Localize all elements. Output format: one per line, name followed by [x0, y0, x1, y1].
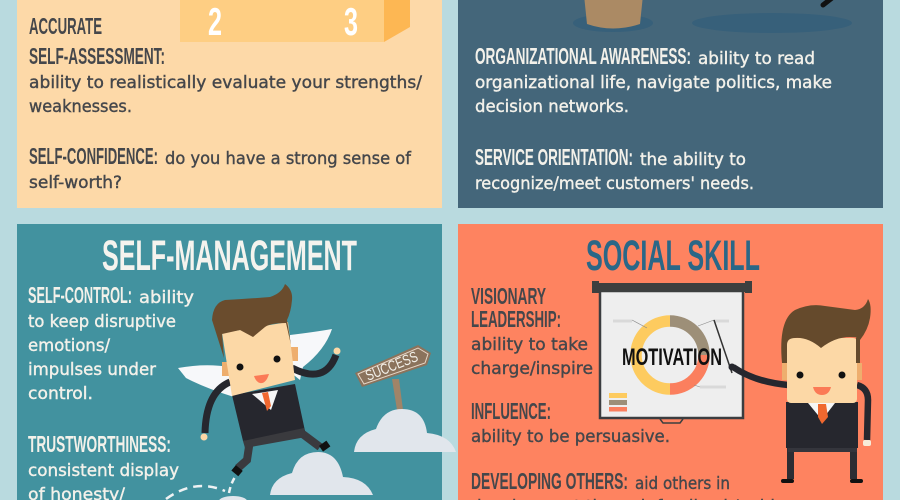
- head and face: [222, 322, 295, 396]
- text: organizational awareness: organizational life, navigate politics, make: [475, 73, 832, 93]
- text: visionary leadership: [471, 283, 593, 379]
- text: influence: INFLUENCE:: [471, 398, 551, 424]
- panel: self-management: [17, 224, 456, 500]
- text: self-confidence: [29, 143, 412, 193]
- icon: success signpost: SUCCESS: [363, 348, 420, 385]
- text: service orientation: [475, 144, 754, 194]
- text: self-confidence: self-worth?: [29, 173, 122, 193]
- text: trustworthiness: consistent display: [28, 461, 179, 481]
- text: developing others: DEVELOPING OTHERS:: [471, 468, 628, 494]
- text: self-confidence: SELF-CONFIDENCE:: [29, 143, 158, 169]
- head and face: [787, 338, 857, 403]
- text: visionary leadership: VISIONARY: [471, 283, 546, 309]
- legs: [238, 432, 320, 468]
- text: organizational awareness: [475, 43, 832, 117]
- text: accurate self-assessment: SELF-ASSESSMENT:: [29, 43, 165, 69]
- text: visionary leadership: charge/inspire: [471, 359, 593, 379]
- icon: dashed jump path: [166, 474, 247, 500]
- text: accurate self-assessment: weaknesses.: [29, 97, 132, 117]
- icon: podium: 2: [208, 1, 222, 44]
- chart legend: [609, 393, 627, 412]
- text: organizational awareness: decision networks.: [475, 97, 629, 117]
- text: visionary leadership: ability to take: [471, 335, 588, 355]
- icon: cloud under sign: [354, 409, 456, 452]
- chart title: MOTIVATION: [622, 344, 722, 371]
- text: service orientation: recognize/meet customers' needs.: [475, 174, 754, 194]
- callout lines: [613, 321, 729, 387]
- panel: social awareness: [458, 0, 883, 208]
- text: influence: ability to be persuasive.: [471, 427, 670, 447]
- text: influence: [471, 398, 670, 447]
- icon: figure shadow and shoe: [692, 0, 852, 33]
- chart: motivation presentation board: [592, 281, 752, 423]
- donut chart: [636, 321, 704, 389]
- text: developing others: [471, 468, 815, 500]
- icon: plant pot with shadow: [573, 0, 653, 32]
- suit: [786, 402, 858, 448]
- text: developing others: aid others in: [635, 474, 730, 494]
- heading: social skill: SOCIAL SKILL: [586, 232, 760, 280]
- wings: [178, 329, 332, 397]
- icon: success signpost: [355, 345, 431, 410]
- text: organizational awareness: ability to read: [698, 49, 815, 69]
- text: accurate self-assessment: ACCURATE: [29, 13, 102, 39]
- text: accurate self-assessment: [29, 13, 422, 117]
- suit: [232, 384, 305, 441]
- text: accurate self-assessment: ability to realistically evaluate your strengths/: [29, 73, 422, 93]
- illustration: flying businessman: [178, 284, 340, 476]
- text: service orientation: SERVICE ORIENTATION:: [475, 144, 633, 170]
- illustration: presenting businessman: [714, 299, 871, 483]
- text: service orientation: the ability to: [640, 150, 746, 170]
- text: self-control: emotions/: [28, 336, 110, 356]
- heading: self-management: SELF-MANAGEMENT: [102, 232, 357, 280]
- text: self-control: to keep disruptive: [28, 312, 176, 332]
- panel: social skill: [458, 224, 883, 500]
- icon: cloud under businessman: [270, 452, 373, 495]
- text: self-control: impulses under: [28, 360, 156, 380]
- arms: [205, 355, 336, 433]
- icon: podium: [180, 0, 410, 44]
- pointer: [714, 320, 732, 373]
- ears: [222, 362, 232, 376]
- text: self-control: ability: [139, 288, 194, 308]
- legs: [781, 448, 863, 483]
- panel: self-awareness: [17, 0, 442, 208]
- text: visionary leadership: LEADERSHIP:: [471, 306, 561, 332]
- arms: [733, 367, 868, 440]
- text: self-confidence: do you have a strong sense of: [165, 149, 412, 169]
- text: self-control: [28, 282, 194, 404]
- text: self-control: SELF-CONTROL:: [28, 282, 132, 308]
- text: self-control: control.: [28, 384, 93, 404]
- text: trustworthiness: [28, 431, 179, 500]
- text: organizational awareness: ORGANIZATIONAL AWARENESS:: [475, 43, 691, 69]
- icon: podium: 3: [344, 1, 358, 44]
- ears: [782, 363, 788, 380]
- text: trustworthiness: TRUSTWORTHINESS:: [28, 431, 171, 457]
